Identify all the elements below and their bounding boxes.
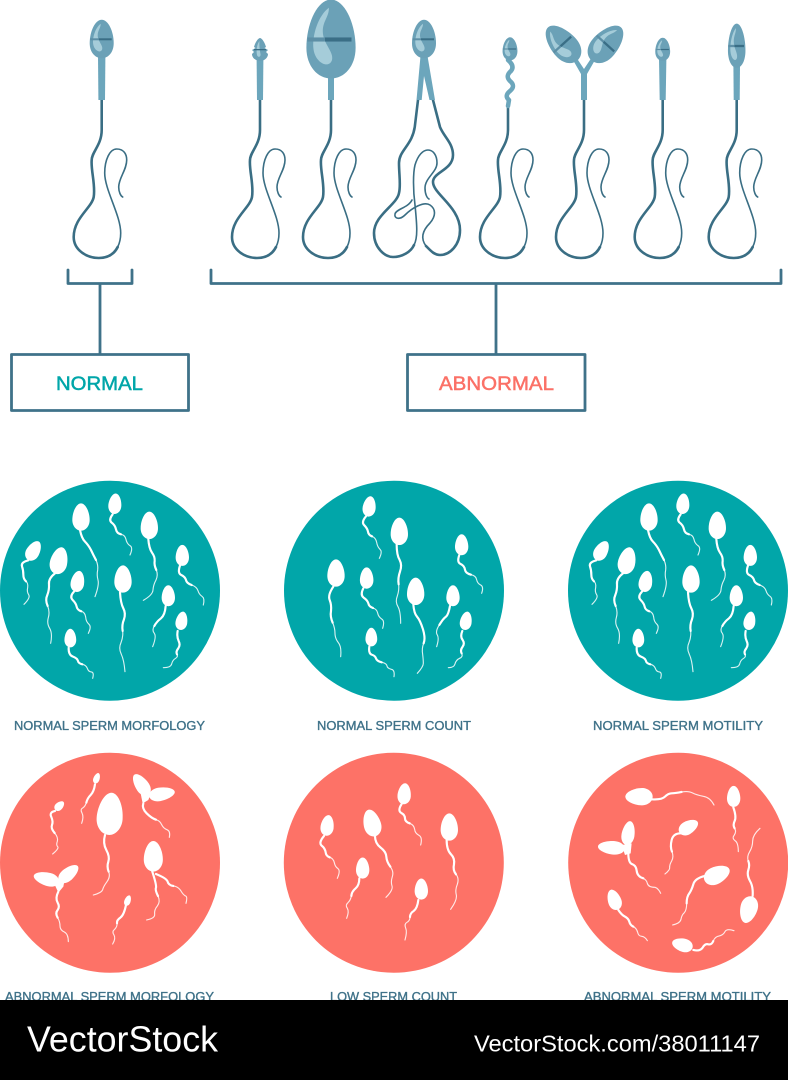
sperm: coiled midpiece [480, 37, 533, 258]
caption: low sperm count: LOW SPERM COUNT [330, 990, 457, 1004]
bracket: abnormal [211, 270, 781, 354]
sperm: elongated head [709, 24, 762, 258]
panel: abnormal sperm motility [568, 753, 788, 973]
caption: normal sperm morphology: NORMAL SPERM MORFOLOGY [14, 719, 206, 733]
label box: normal [12, 354, 188, 410]
sperm: small head [635, 38, 688, 258]
caption: normal sperm motility: NORMAL SPERM MOTILITY [593, 719, 764, 733]
panel: normal sperm morphology [0, 481, 220, 701]
sperm: small tapered head [232, 38, 285, 258]
sperm: double tail [374, 20, 460, 257]
label box: abnormal [408, 354, 585, 410]
label box: normal: NORMAL [56, 373, 143, 395]
watermark bar: VectorStock.com/38011147 [474, 1030, 760, 1056]
label box: abnormal: ABNORMAL [439, 373, 554, 395]
bracket: normal [68, 270, 132, 354]
panel: normal sperm count [284, 481, 504, 701]
sperm: normal [74, 20, 127, 258]
caption: abnormal sperm morphology: ABNORMAL SPERM MORFOLOGY [5, 990, 215, 1004]
sperm: large head [303, 0, 356, 258]
panel: abnormal sperm morphology [0, 753, 220, 973]
panel: low sperm count [284, 753, 504, 973]
panel: normal sperm motility [568, 481, 788, 701]
caption: normal sperm count: NORMAL SPERM COUNT [317, 719, 471, 733]
watermark bar [0, 1000, 788, 1080]
caption: abnormal sperm motility: ABNORMAL SPERM MOTILITY [584, 990, 772, 1004]
sperm: two heads [538, 19, 631, 258]
watermark bar: VectorStock [27, 1018, 219, 1060]
